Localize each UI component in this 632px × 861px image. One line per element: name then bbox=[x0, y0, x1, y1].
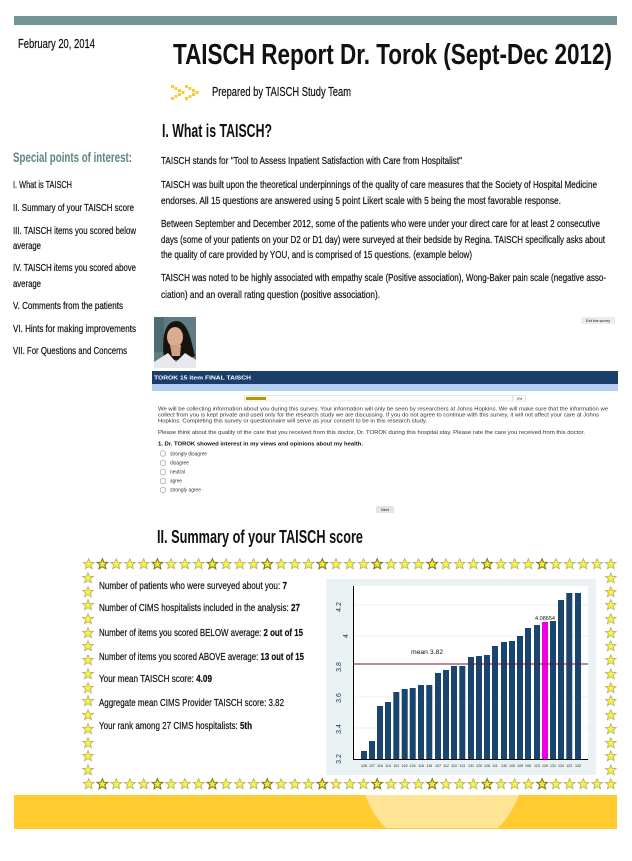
axes bbox=[354, 586, 588, 760]
x axis labels: 115 bbox=[426, 764, 432, 768]
x axis labels: 131 bbox=[468, 764, 474, 768]
annotation: mean: mean 3.82 bbox=[411, 649, 443, 656]
panel: score summary statistics: Your mean TAISCH score: 4.09 bbox=[99, 673, 212, 685]
x axis labels: 104 bbox=[410, 764, 416, 768]
x axis labels: 124 bbox=[558, 764, 564, 768]
survey consent text: Please think about the quality of the care that you received from this doctor, Dr. TOROK during this hospital stay. Please rate the care you received from this doctor. bbox=[158, 430, 585, 436]
panel: score summary statistics: Number of items you scored BELOW average: 2 out of 15 bbox=[99, 627, 303, 639]
sidebar list bbox=[13, 179, 136, 357]
sidebar list: III. TAISCH items you scored below bbox=[13, 225, 136, 237]
x axis labels: 123 bbox=[534, 764, 540, 768]
survey answer options: agree bbox=[170, 478, 182, 484]
sidebar heading: Special points of interest: bbox=[13, 149, 132, 165]
x axis labels: 106 bbox=[525, 764, 531, 768]
panel: survey screenshot bbox=[152, 371, 618, 513]
text block: description of TAISCH: ciation) and an overall rating question (positive association). bbox=[161, 289, 380, 301]
photo: Dr. Torok portrait bbox=[154, 317, 196, 368]
y axis labels: 3.4 bbox=[336, 724, 343, 734]
x axis labels: 109 bbox=[517, 764, 523, 768]
survey consent text: 1. Dr. TOROK showed interest in my views and opinions about my health. bbox=[158, 442, 364, 448]
survey header bar bbox=[152, 371, 618, 391]
x axis labels: 120 bbox=[476, 764, 482, 768]
x axis labels: 122 bbox=[566, 764, 572, 768]
y axis labels: 3.6 bbox=[336, 693, 343, 703]
survey consent text: Hopkins. Completing this survey or questionnaire will serve as your consent to be in this research study. bbox=[158, 418, 427, 424]
subtitle: Prepared by TAISCH Study Team bbox=[212, 84, 351, 99]
button: exit survey: Exit this survey bbox=[586, 319, 610, 323]
sidebar list: II. Summary of your TAISCH score bbox=[13, 202, 134, 214]
y axis labels: 4 bbox=[343, 634, 350, 638]
footer band bbox=[14, 795, 617, 829]
x axis labels: 128 bbox=[361, 764, 367, 768]
sidebar list: V. Comments from the patients bbox=[13, 300, 123, 312]
x axis labels: 131 bbox=[550, 764, 556, 768]
y axis labels bbox=[336, 602, 350, 764]
x axis labels: 112 bbox=[443, 764, 449, 768]
bars bbox=[361, 593, 581, 759]
x axis labels: 129 bbox=[542, 764, 548, 768]
star border bbox=[83, 559, 616, 789]
y axis labels: 3.8 bbox=[336, 662, 343, 672]
panel: score summary statistics: Number of patients who were surveyed about you: 7 bbox=[99, 580, 287, 592]
panel: score summary statistics: Your rank among 27 CIMS hospitalists: 5th bbox=[99, 720, 252, 732]
x axis labels: 102 bbox=[402, 764, 408, 768]
panel: score summary statistics: Number of items you scored ABOVE average: 13 out of 15 bbox=[99, 651, 304, 663]
panel: sidebar special points of interest bbox=[13, 149, 136, 357]
x axis labels: 132 bbox=[575, 764, 581, 768]
icon: dotted double arrow bbox=[171, 85, 198, 100]
x axis labels: 118 bbox=[418, 764, 424, 768]
x axis labels: 114 bbox=[385, 764, 391, 768]
button: exit survey bbox=[581, 317, 615, 324]
bar chart: TAISCH score by hospitalist bbox=[326, 579, 596, 775]
panel: score summary statistics: Number of CIMS hospitalists included in the analysis: 27 bbox=[99, 602, 300, 614]
date: February 20, 2014 bbox=[18, 36, 95, 51]
heading: Summary of your TAISCH score: II. Summary of your TAISCH score bbox=[157, 527, 363, 547]
x axis labels: 116 bbox=[377, 764, 383, 768]
survey answer options: disagree bbox=[170, 460, 189, 466]
button: next bbox=[376, 506, 394, 513]
x axis labels: 126 bbox=[484, 764, 490, 768]
progress bar bbox=[244, 396, 526, 401]
x axis labels: 105 bbox=[509, 764, 515, 768]
x axis labels: 127 bbox=[369, 764, 375, 768]
sidebar list: average bbox=[13, 278, 41, 290]
x axis labels: 110 bbox=[451, 764, 457, 768]
text block: description of TAISCH bbox=[161, 155, 606, 301]
top banner bar bbox=[14, 16, 617, 25]
y axis labels: 4.2 bbox=[336, 602, 343, 612]
x axis labels: 107 bbox=[435, 764, 441, 768]
sidebar list: I. What is TAISCH bbox=[13, 179, 72, 191]
panel: score summary statistics: Aggregate mean CIMS Provider TAISCH score: 3.82 bbox=[99, 697, 284, 709]
survey answer options bbox=[160, 451, 207, 494]
survey answer options: strongly disagree bbox=[170, 452, 207, 458]
text block: description of TAISCH: the quality of care provided by YOU, and is comprised of 15 questions. (example below) bbox=[161, 249, 472, 261]
heading: What is TAISCH: I. What is TAISCH? bbox=[162, 121, 272, 141]
x axis labels: 101 bbox=[393, 764, 399, 768]
x axis labels: 130 bbox=[501, 764, 507, 768]
panel: score summary statistics bbox=[99, 580, 304, 732]
x axis labels: 111 bbox=[492, 764, 498, 768]
sidebar list: VII. For Questions and Concerns bbox=[13, 345, 127, 357]
survey consent text: collect from you is kept private and used only for the research study we are discussing. If you do not agree to continue with this survey, it will not affect your care at Johns bbox=[158, 412, 600, 418]
survey consent text bbox=[158, 406, 608, 448]
text block: description of TAISCH: TAISCH stands for "Tool to Assess Inpatient Satisfaction with Care from Hospitalist" bbox=[161, 155, 462, 167]
survey answer options: strongly agree bbox=[170, 488, 201, 494]
survey consent text: We will be collecting information about you during this survey. Your information will only be seen by researchers at Johns Hopkins. We will make sure that the information we bbox=[158, 406, 608, 412]
sidebar list: IV. TAISCH items you scored above bbox=[13, 262, 136, 274]
annotation: your score: 4.08654 bbox=[535, 616, 555, 622]
survey answer options: neutral bbox=[170, 470, 185, 476]
sidebar list: average bbox=[13, 240, 41, 252]
y axis labels: 3.2 bbox=[336, 754, 343, 764]
mean line bbox=[353, 664, 588, 665]
progress bar: 0% bbox=[517, 397, 522, 401]
sidebar list: VI. Hints for making improvements bbox=[13, 323, 136, 335]
x axis labels bbox=[361, 764, 581, 768]
button: next: Next bbox=[381, 508, 390, 512]
x axis labels: 113 bbox=[459, 764, 465, 768]
survey header bar: TOROK 15 item FINAL TAISCH bbox=[154, 376, 251, 382]
